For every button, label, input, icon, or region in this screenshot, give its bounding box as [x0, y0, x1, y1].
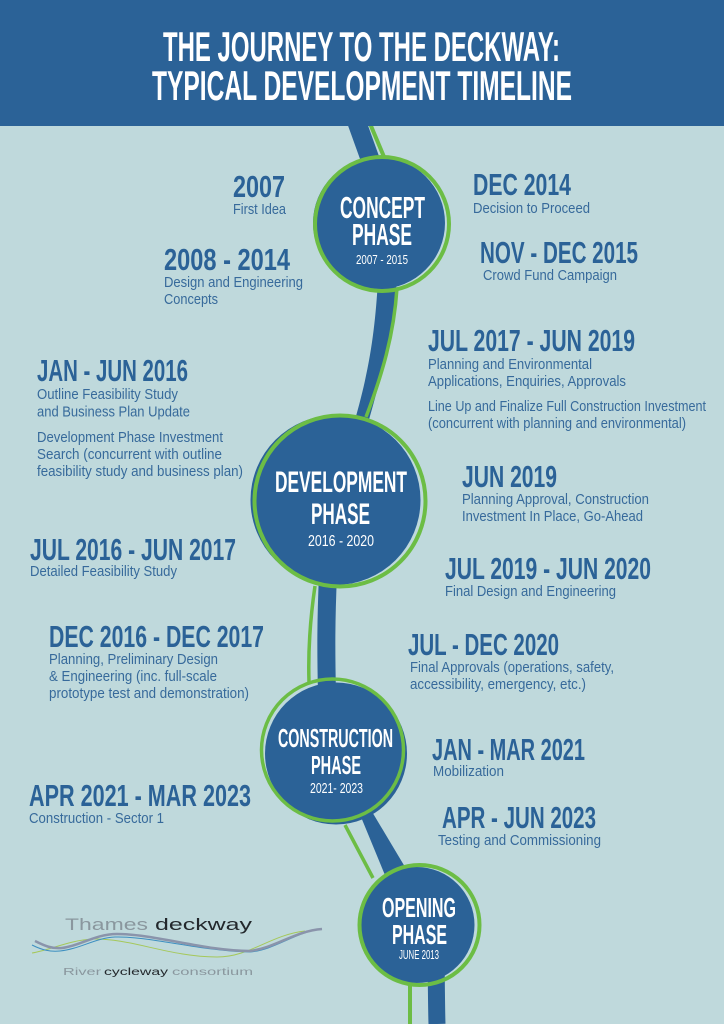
concept phase circle: PHASE [352, 217, 412, 252]
milestone: Jul 2016-Jun 2017 [30, 532, 236, 580]
header banner [0, 0, 724, 126]
milestone: Nov-Dec 2015 [480, 235, 638, 284]
milestone: 2008-2014: Design and Engineering [164, 275, 303, 291]
milestone: Jul 2017-Jun 2019 [428, 323, 706, 432]
development phase circle: PHASE [311, 498, 370, 531]
milestone: Jul 2017-Jun 2019: (concurrent with planning and environmental) [428, 416, 686, 432]
milestone: 2008-2014 [164, 242, 303, 308]
milestone: Jul 2017-Jun 2019: Applications, Enquiries, Approvals [428, 374, 626, 390]
milestone: Nov-Dec 2015: NOV - DEC 2015 [480, 235, 638, 270]
milestone: Jan-Mar 2021: JAN - MAR 2021 [432, 732, 585, 767]
opening phase circle: JUNE 2013 [399, 947, 439, 962]
logo: Thames Deckway: River [63, 967, 102, 978]
logo: Thames Deckway: deckway [155, 915, 253, 934]
milestone: Apr 2021-Mar 2023: Construction - Sector 1 [29, 811, 164, 827]
milestone: Dec 2014: DEC 2014 [473, 167, 572, 202]
milestone: Dec 2016-Dec 2017: Planning, Preliminary Design [49, 652, 218, 668]
opening phase circle: OPENING [382, 892, 456, 923]
milestone: Dec 2016-Dec 2017: DEC 2016 - DEC 2017 [49, 619, 264, 654]
concept phase circle: CONCEPT [340, 190, 425, 225]
milestone: Apr 2021-Mar 2023 [29, 778, 251, 827]
milestone: 2008-2014: Concepts [164, 292, 218, 308]
opening phase circle: PHASE [392, 919, 447, 950]
milestone: 2007: 2007 [233, 169, 285, 204]
construction phase circle [262, 679, 407, 824]
milestone: Dec 2016-Dec 2017: & Engineering (inc. full-scale [49, 669, 217, 685]
milestone: Jan-Jun 2016 [37, 353, 243, 480]
milestone: Dec 2014 [473, 167, 590, 217]
milestone: 2007: First Idea [233, 202, 287, 218]
construction phase circle: PHASE [311, 750, 361, 780]
milestone: Jun 2019: Planning Approval, Construction [462, 492, 649, 508]
milestone: Jul 2019-Jun 2020: Final Design and Engineering [445, 584, 616, 600]
milestone: 2007 [233, 169, 287, 218]
logo: Thames Deckway [32, 915, 322, 978]
milestone: Jul-Dec 2020: accessibility, emergency, etc.) [410, 677, 586, 693]
milestone: Jan-Jun 2016: feasibility study and business plan) [37, 464, 243, 480]
milestone: Apr 2021-Mar 2023: APR 2021 - MAR 2023 [29, 778, 251, 813]
milestone: Dec 2016-Dec 2017 [49, 619, 264, 702]
opening phase circle [358, 865, 480, 985]
milestone: Jul 2016-Jun 2017: JUL 2016 - JUN 2017 [30, 532, 236, 567]
milestone: Jun 2019: JUN 2019 [462, 459, 557, 494]
construction phase circle: 2021- 2023 [310, 781, 363, 797]
milestone: Nov-Dec 2015: Crowd Fund Campaign [483, 268, 617, 284]
milestone: Apr-Jun 2023: APR - JUN 2023 [442, 800, 596, 835]
milestone: 2008-2014: 2008 - 2014 [164, 242, 291, 277]
timeline path: road and green line [309, 120, 437, 1024]
milestone: Jul 2017-Jun 2019: Planning and Environmental [428, 357, 592, 373]
logo: Thames Deckway: consortium [172, 967, 253, 978]
development phase circle: DEVELOPMENT [275, 466, 407, 499]
milestone: Dec 2016-Dec 2017: prototype test and demonstration) [49, 686, 249, 702]
milestone: Jan-Jun 2016: and Business Plan Update [37, 404, 190, 420]
milestone: Apr-Jun 2023 [438, 800, 601, 849]
milestone: Jul-Dec 2020: Final Approvals (operations, safety, [410, 660, 614, 676]
milestone: Jan-Jun 2016: Outline Feasibility Study [37, 387, 179, 403]
milestone: Apr-Jun 2023: Testing and Commissioning [438, 833, 601, 849]
development phase circle [250, 415, 426, 586]
milestone: Jun 2019: Investment In Place, Go-Ahead [462, 509, 643, 525]
milestone: Jul 2019-Jun 2020 [445, 551, 651, 600]
development phase circle: 2016 - 2020 [308, 533, 374, 550]
concept phase circle: 2007 - 2015 [356, 252, 408, 267]
concept phase circle [313, 157, 449, 291]
milestone: Jul-Dec 2020 [408, 627, 614, 693]
milestone: Jan-Mar 2021: Mobilization [433, 764, 504, 780]
construction phase circle: CONSTRUCTION [278, 723, 393, 753]
title [152, 23, 572, 109]
milestone: Jul 2016-Jun 2017: Detailed Feasibility Study [30, 564, 178, 580]
milestone: Jul 2017-Jun 2019: JUL 2017 - JUN 2019 [428, 323, 635, 358]
milestone: Jan-Jun 2016: JAN - JUN 2016 [37, 353, 188, 388]
milestone: Dec 2014: Decision to Proceed [473, 201, 590, 217]
logo: Thames Deckway: Thames [65, 915, 148, 934]
milestone: Jul-Dec 2020: JUL - DEC 2020 [408, 627, 559, 662]
milestone: Jan-Mar 2021 [432, 732, 585, 780]
milestone: Jan-Jun 2016: Development Phase Investment [37, 430, 223, 446]
milestone: Jun 2019 [462, 459, 649, 525]
logo: Thames Deckway: cycleway [104, 967, 168, 978]
milestone: Jan-Jun 2016: Search (concurrent with outline [37, 447, 222, 463]
